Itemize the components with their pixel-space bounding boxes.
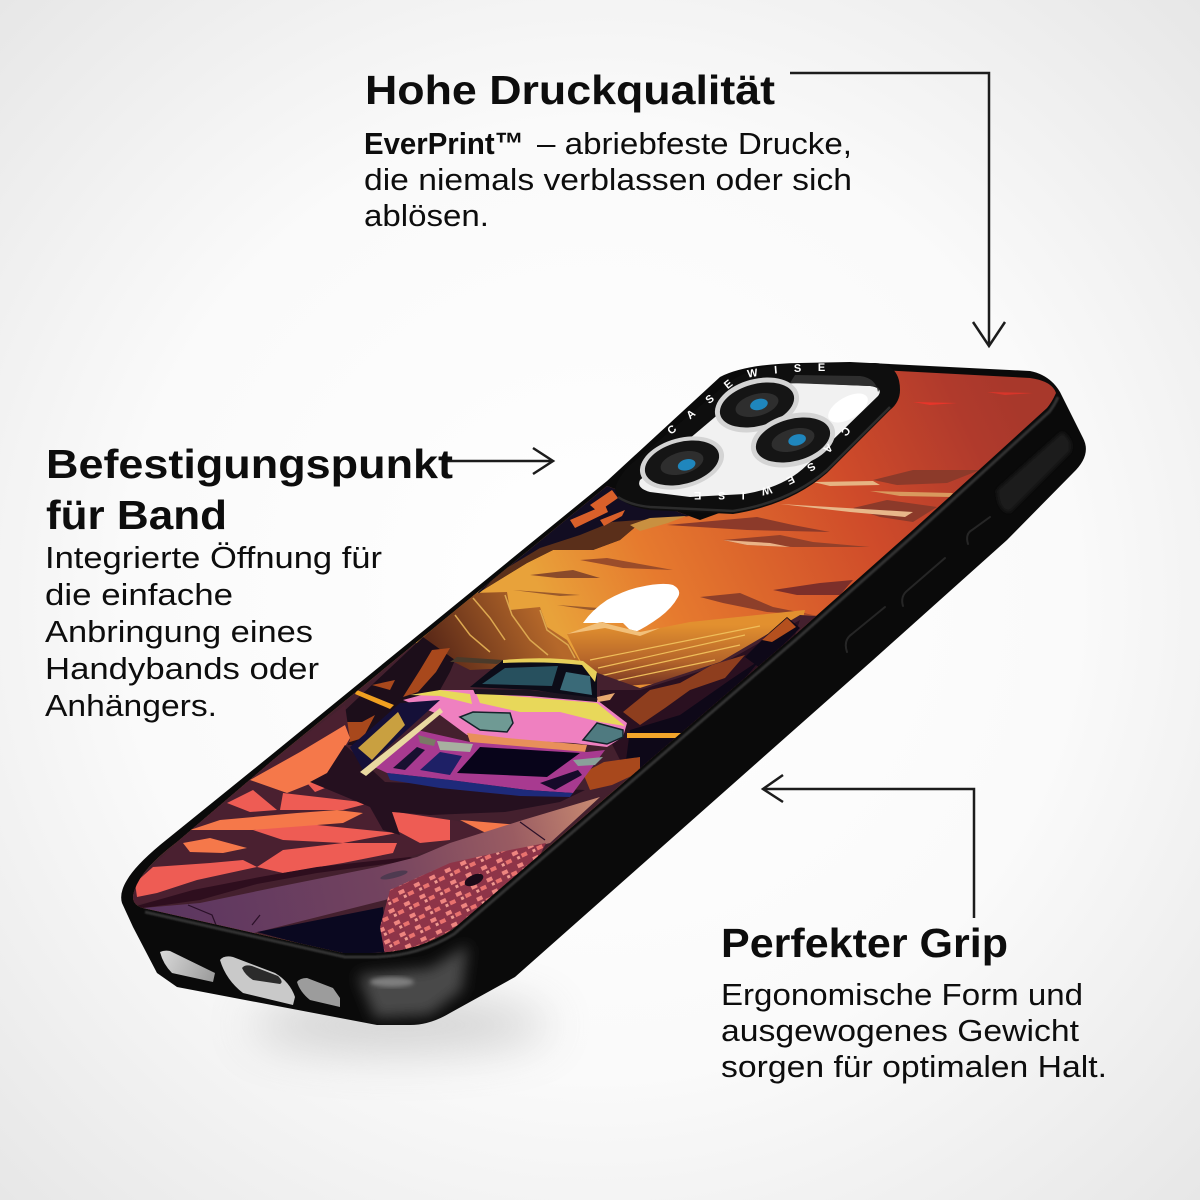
- roadside bush: [583, 757, 640, 790]
- arrow: grip: [763, 775, 974, 918]
- left forest: [340, 637, 455, 745]
- camera plate: [639, 383, 880, 497]
- inner top shadow: [790, 375, 879, 392]
- lens top: [709, 369, 805, 441]
- rear wing: [450, 657, 503, 664]
- roof edge: [503, 658, 597, 682]
- heading and text: grip: Ergonomische Form und: [721, 977, 1083, 1012]
- road cracks: [188, 822, 545, 925]
- ground: [133, 615, 816, 953]
- heading and text: print quality: EverPrint™: [364, 126, 524, 161]
- front grille mouth: [457, 747, 580, 777]
- case rim highlight: [145, 397, 1058, 957]
- case glossy corner: [358, 945, 468, 1018]
- bump lower lip: [618, 407, 890, 511]
- heading and text: print quality: [364, 67, 852, 233]
- coral road base: [133, 710, 350, 904]
- canopy brown foliage: [484, 520, 646, 590]
- usb port: [220, 956, 295, 1005]
- distant cloud mountain: [420, 592, 579, 670]
- pink flower bush: [380, 843, 546, 955]
- fog lights: [437, 741, 473, 752]
- heading and text: strap attachment: Befestigungspunkt: [46, 441, 453, 487]
- bottom left speaker: [160, 951, 215, 982]
- mirror: [597, 693, 615, 702]
- hood yellow: [476, 693, 625, 726]
- sunset sun: [583, 584, 679, 633]
- lens left: [634, 428, 730, 498]
- coral light patches on road: [136, 783, 450, 897]
- orange road highlights: [183, 725, 520, 853]
- yellow stripe right: [627, 733, 682, 738]
- dark band above asphalt: [133, 857, 417, 908]
- canopy glow: [630, 516, 686, 531]
- heading and text: strap attachment: die einfache: [45, 577, 233, 612]
- heading and text: grip: sorgen für optimalen Halt.: [721, 1049, 1107, 1084]
- arrow: print quality: [790, 73, 1005, 346]
- open side panel: [350, 700, 440, 770]
- heading and text: print quality: ablösen.: [364, 198, 489, 233]
- heading and text: grip: [721, 920, 1107, 1084]
- sun glow clouds: [567, 622, 660, 636]
- right dark hillside: [600, 620, 800, 770]
- left vent: [393, 747, 425, 770]
- heading and text: strap attachment: Integrierte Öffnung für: [45, 540, 382, 575]
- bumper frame: [370, 730, 605, 793]
- headlights: [460, 712, 513, 732]
- case body: [121, 362, 1086, 1025]
- brand ring text: CASEWISE: [668, 363, 825, 434]
- printed artwork: [133, 370, 1056, 953]
- canopy leaves: [570, 490, 625, 528]
- sky: [133, 370, 1056, 953]
- camera bump: [615, 363, 900, 514]
- road patch: [380, 870, 408, 880]
- dark peak: [745, 617, 800, 668]
- heading and text: strap attachment: Handybands oder: [45, 651, 319, 686]
- lens right: [745, 404, 841, 476]
- camera bump: CASEWISE: [694, 428, 850, 500]
- arrow: strap attachment: [447, 448, 553, 474]
- dark road shadow: [257, 907, 387, 955]
- heading and text: strap attachment: für Band: [46, 492, 227, 538]
- right vent: [540, 770, 582, 790]
- tree canopy under camera: [478, 486, 690, 593]
- heading and text: grip: Perfekter Grip: [721, 920, 1008, 966]
- heading and text: print quality: Hohe Druckqualität: [365, 67, 775, 113]
- side buttons: [846, 517, 990, 652]
- heading and text: strap attachment: [45, 441, 453, 723]
- valley light lines: [590, 626, 760, 682]
- peach nose band: [467, 733, 587, 752]
- forest orange edge: [340, 648, 450, 745]
- sky clouds: [513, 392, 1033, 615]
- side switch panel: [997, 432, 1071, 512]
- phone shadow: [250, 999, 550, 1051]
- purple asphalt: [143, 797, 600, 933]
- yellow roadside stripe: [355, 690, 394, 709]
- heading and text: print quality: – abriebfeste Drucke,: [537, 126, 852, 161]
- heading and text: print quality: die niemals verblassen oder sich: [364, 162, 852, 197]
- windshield base shadow: [473, 689, 597, 702]
- bump frame: [615, 363, 900, 514]
- lower lip blue: [387, 773, 573, 797]
- fender yellow: [410, 690, 472, 704]
- mountain highlights: [455, 595, 575, 658]
- phone with case: [121, 362, 1086, 1025]
- car shadow: [310, 745, 585, 835]
- golden valley hills: [567, 610, 805, 688]
- windshield: [482, 666, 558, 686]
- heading and text: strap attachment: Anhängers.: [45, 688, 217, 723]
- flash: [823, 387, 873, 429]
- sports car: [350, 657, 627, 797]
- cabin: [470, 659, 597, 700]
- heading and text: grip: ausgewogenes Gewicht: [721, 1013, 1079, 1048]
- heading and text: strap attachment: Anbringung eines: [45, 614, 313, 649]
- body pink base: [403, 690, 627, 747]
- bottom right speaker: [297, 978, 340, 1007]
